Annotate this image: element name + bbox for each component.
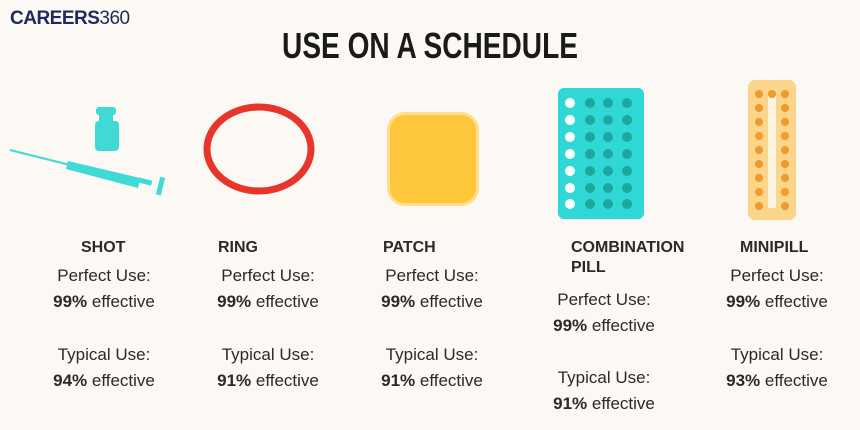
text: Typical Use: bbox=[58, 345, 150, 364]
text: 91% effective bbox=[381, 371, 483, 390]
text: SHOT bbox=[81, 239, 125, 256]
icon: minipill pack bbox=[748, 80, 796, 220]
title: USE ON A SCHEDULE bbox=[282, 25, 578, 66]
text: Perfect Use: bbox=[385, 266, 479, 285]
text: 99% effective bbox=[553, 316, 655, 335]
column: combination pill bbox=[553, 239, 684, 413]
text: MINIPILL bbox=[740, 239, 808, 256]
column: patch bbox=[381, 239, 483, 390]
text: 99% effective bbox=[53, 292, 155, 311]
text: Typical Use: bbox=[386, 345, 478, 364]
logo: CAREERS360 bbox=[10, 8, 130, 29]
text: COMBINATION bbox=[571, 239, 684, 256]
text: Perfect Use: bbox=[557, 290, 651, 309]
text: 91% effective bbox=[217, 371, 319, 390]
text: Typical Use: bbox=[558, 368, 650, 387]
column: minipill bbox=[726, 239, 828, 390]
icon: ring bbox=[204, 104, 314, 194]
text: PATCH bbox=[383, 239, 436, 256]
column: ring bbox=[217, 239, 319, 390]
text: 99% effective bbox=[217, 292, 319, 311]
text: Perfect Use: bbox=[57, 266, 151, 285]
text: RING bbox=[218, 239, 258, 256]
text: Perfect Use: bbox=[221, 266, 315, 285]
icon: combination pill pack bbox=[558, 88, 644, 219]
text: Perfect Use: bbox=[730, 266, 824, 285]
text: 99% effective bbox=[381, 292, 483, 311]
text: Typical Use: bbox=[222, 345, 314, 364]
icon: patch bbox=[387, 112, 479, 206]
text: 99% effective bbox=[726, 292, 828, 311]
icon: syringe and vial bbox=[10, 107, 166, 196]
text: PILL bbox=[571, 259, 606, 276]
text: 91% effective bbox=[553, 394, 655, 413]
column: shot bbox=[53, 239, 155, 390]
text: 94% effective bbox=[53, 371, 155, 390]
text: 93% effective bbox=[726, 371, 828, 390]
text: Typical Use: bbox=[731, 345, 823, 364]
